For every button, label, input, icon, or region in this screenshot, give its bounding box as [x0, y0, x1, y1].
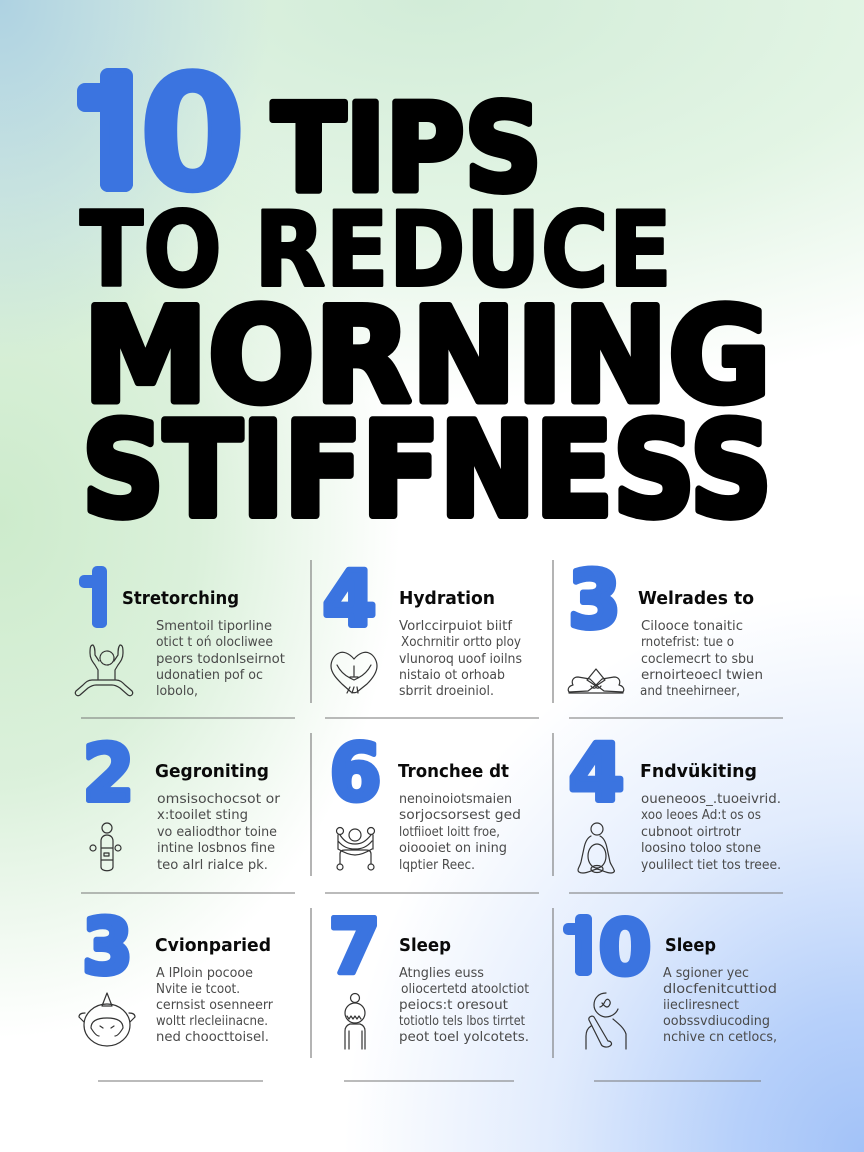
body text: lobolo, [156, 684, 198, 699]
body text: totiotlo tels lbos tirrtet [399, 1014, 525, 1029]
panel: tip 10 sleep [563, 903, 777, 1049]
body text: Smentoil tiporline [156, 619, 272, 634]
body text: Vorlccirpuiot biitf [399, 619, 512, 634]
body text: otict t oń olocliwee [156, 635, 273, 650]
title number 10: 0 [139, 40, 246, 227]
body text: Cilooce tonaitic [641, 619, 743, 634]
body text: sorjocsorsest ged [399, 808, 521, 823]
body text: vlunoroq uoof ioilns [399, 652, 522, 667]
body text: teo alrl rialce pk. [157, 858, 268, 873]
body text: Atnglies euss [399, 966, 484, 981]
panel: tip 3 welrades [568, 556, 763, 699]
icon: person with shoulder pain [586, 993, 626, 1049]
title line STIFFNESS: STIFFNESS [82, 394, 772, 546]
body text: peiocs:t oresout [399, 998, 508, 1013]
heading: Sleep [665, 935, 716, 956]
body text: peot toel yolcotets. [399, 1030, 529, 1045]
body text: oueneoos_.tuoeivrid. [641, 792, 781, 807]
body text [399, 966, 529, 1045]
number 2: 2 [82, 730, 134, 820]
body text: xoo leoes Ad:t os os [641, 808, 761, 823]
body text: intine losbnos fine [157, 841, 275, 856]
number 7: 7 [328, 902, 380, 991]
body text: omsisochocsot or [157, 792, 281, 807]
heading: Hydration [399, 588, 495, 609]
number 1: 1 [88, 559, 113, 640]
icon: head with hands [79, 993, 135, 1046]
number 3: 3 [568, 556, 620, 646]
body text: Xochrnitir ortto ploy [401, 635, 521, 650]
body text: iiecliresnect [663, 998, 739, 1013]
icon: meditating person [578, 823, 614, 873]
heading: Welrades to [638, 588, 754, 609]
body text: ernoirteoecl twien [641, 668, 763, 683]
number 4: 4 [569, 729, 624, 819]
body text: nistaio ot orhoab [399, 668, 505, 683]
body text: x:tooilet sting [157, 808, 248, 823]
body text: Nvite ie tcoot. [156, 982, 240, 997]
body text [641, 792, 781, 873]
panel: tip 4 hydration [323, 554, 522, 699]
body text [157, 792, 281, 873]
number 1 [79, 566, 107, 628]
body text: coclemecrt to sbu [641, 652, 754, 667]
icon: stretching person [75, 645, 133, 696]
heading: Cvionparied [155, 935, 271, 956]
icon: figure with circles [90, 823, 121, 871]
body text: rnotefrist: tue o [641, 635, 734, 650]
body text: oliocertetd atoolctiot [401, 982, 529, 997]
body text [156, 619, 285, 699]
panel: tip 4 fndvukiting [569, 729, 781, 873]
body text: lqptier Reec. [399, 858, 475, 873]
heading: Fndvükiting [640, 761, 757, 782]
icon: lotus [568, 669, 624, 693]
body text: youlilect tiet tos treee. [641, 858, 781, 873]
icon: heart with hands [331, 652, 377, 693]
icon: person standing [345, 994, 365, 1049]
body text: cubnoot oirtrotr [641, 825, 742, 840]
panel: tip 3 cvionparied [79, 902, 274, 1046]
body text [399, 792, 521, 873]
body text: vo ealiodthor toine [157, 825, 277, 840]
number 3: 3 [82, 902, 132, 991]
infographic canvas [74, 68, 783, 1082]
icon: people on bench [336, 828, 374, 870]
body text: lotfiioet loitt froe, [399, 825, 500, 840]
body text: loosino toloo stone [641, 841, 761, 856]
number 10 [563, 914, 650, 978]
heading: Gegroniting [155, 761, 269, 782]
title [77, 68, 768, 521]
heading: Tronchee dt [398, 761, 509, 782]
body text: dlocfenitcuttiod [663, 982, 777, 997]
body text: A lPloin pocooe [156, 966, 253, 981]
heading: Stretorching [122, 588, 239, 609]
number 6: 6 [330, 729, 382, 819]
body text: and tneehirneer, [640, 684, 740, 699]
panel: tip 6 tronchee [330, 729, 521, 873]
body text [399, 619, 522, 699]
body text: oobssvdiucoding [663, 1014, 770, 1029]
heading: Sleep [399, 935, 451, 956]
body text: woltt rlecleiinacne. [156, 1014, 268, 1029]
body text: udonatien pof oc [156, 668, 263, 683]
panel: tip 1 stretching [75, 559, 285, 699]
panel: tip 2 gegroniting [82, 730, 281, 873]
title number 10 [77, 68, 241, 194]
body text: peors todonlseirnot [156, 652, 285, 667]
body text [663, 966, 777, 1045]
number 10: 0 [598, 903, 652, 992]
body text: nenoinoiotsmaien [399, 792, 512, 807]
body text: oioooiet on ining [399, 841, 507, 856]
title number 10: 1 [98, 53, 142, 212]
number 4: 4 [323, 554, 376, 643]
body text: A sgioner yec [663, 966, 749, 981]
body text [156, 966, 274, 1045]
body text [640, 619, 763, 699]
body text: sbrrit droeiniol. [399, 684, 494, 699]
title line MORNING: MORNING [83, 279, 771, 432]
body text: nchive cn cetlocs, [663, 1030, 777, 1045]
title line TO REDUCE: TO REDUCE [80, 190, 672, 310]
title word TIPS: TIPS [272, 80, 542, 219]
body text: cernsist osenneerr [156, 998, 274, 1013]
body text: ned choocttoisel. [156, 1030, 269, 1045]
panel: tip 7 sleep [328, 902, 529, 1049]
number 10: 1 [575, 904, 598, 988]
